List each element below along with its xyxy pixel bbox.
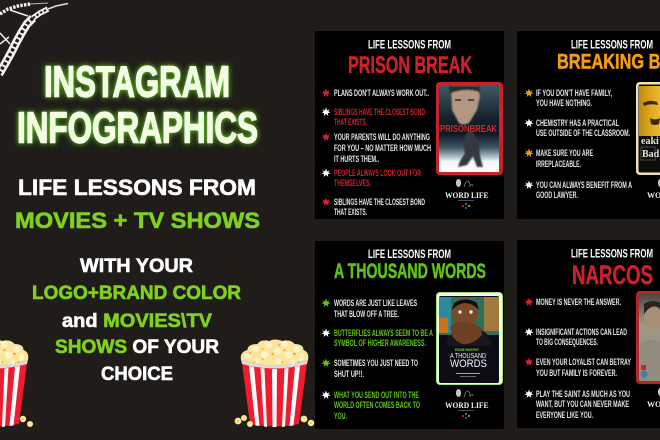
- bullet list: YOU.: [334, 411, 347, 421]
- bullet list: PLANS DON'T ALWAYS WORK OUT..: [334, 88, 429, 98]
- poster: A Thousand Words: [436, 292, 503, 385]
- bullet list: YOUR PARENTS WILL DO ANYTHING: [334, 132, 430, 142]
- panel: Breaking Bad: [517, 31, 660, 219]
- poster: Breaking Bad: eaki: [641, 136, 659, 147]
- bullet list: THAT EXISTS.: [334, 117, 367, 127]
- bullet list: SYMBOL OF HIGHER AWARENESS.: [334, 338, 426, 348]
- icon: popcorn left: [0, 340, 33, 427]
- bullet list: SHUT UP!!.: [334, 369, 364, 379]
- text block: offer: SHOWS OF YOUR: [55, 336, 219, 358]
- bullet list: THAT EXISTS.: [334, 207, 367, 217]
- panel: A Thousand Words: [315, 241, 504, 429]
- poster: A Thousand Words: EDDIE MURPHY: [455, 347, 479, 352]
- poster: Prison Break: PRISONBREAK: [440, 124, 498, 135]
- icon: film strip: [0, 3, 68, 74]
- bullet list: THAT BLOW OFF A TREE.: [334, 309, 399, 319]
- panel: Prison Break: [315, 31, 504, 219]
- text block: offer: LOGO+BRAND COLOR: [32, 283, 241, 304]
- logo: Word Life: WORD LIFE: [445, 191, 488, 200]
- poster: Prison Break: [436, 82, 503, 175]
- poster: Breaking Bad: [636, 82, 660, 175]
- bullet list: SOMETIMES YOU JUST NEED TO: [334, 358, 418, 368]
- poster: Breaking Bad: Bad: [642, 149, 660, 160]
- heading: Prison Break: PRISON BREAK: [348, 52, 472, 79]
- text block: offer: [32, 255, 241, 385]
- heading: Prison Break: [348, 40, 472, 79]
- text block: offer: WITH YOUR: [80, 255, 193, 277]
- bullet list: SIBLINGS HAVE THE CLOSEST BOND: [334, 197, 425, 207]
- bullet list: BUTTERFLIES ALWAYS SEEM TO BE A: [334, 328, 433, 338]
- title: Instagram Infographics: INFOGRAPHICS: [17, 104, 258, 152]
- subtitle: LIFE LESSONS FROM: [18, 175, 256, 200]
- bullet list: THEMSELVES.: [334, 178, 371, 188]
- bullet list: SIBLINGS HAVE THE CLOSEST BOND: [334, 107, 425, 117]
- bullet list: WHAT YOU SEND OUT INTO THE: [334, 390, 419, 400]
- heading: Breaking Bad: [557, 40, 660, 74]
- logo: Word Life: [445, 389, 488, 419]
- bullet list: IT HURTS THEM..: [334, 154, 379, 164]
- text block: offer: and MOVIES\TV: [62, 311, 212, 332]
- logo: Word Life: [647, 179, 660, 209]
- bullet list: WORLD OFTEN COMES BACK TO: [334, 400, 420, 410]
- bullet list: MAKE SURE YOU ARE: [536, 148, 593, 158]
- poster: A Thousand Words: A THOUSAND: [450, 353, 486, 360]
- heading: A Thousand Words: [334, 249, 486, 283]
- bullet list: PEOPLE ALWAYS LOOK OUT FOR: [334, 168, 421, 178]
- logo: Word Life: WORD LIFE: [445, 401, 488, 410]
- bullet list: TO BIG CONSEQUENCES.: [536, 337, 598, 347]
- panel: Narcos: [517, 240, 660, 428]
- bullet list: IRREPLACEABLE.: [536, 159, 581, 169]
- icon: popcorn right: [235, 340, 314, 427]
- bullet list: [524, 88, 632, 200]
- bullet list: [322, 298, 433, 421]
- subtitle: MOVIES + TV SHOWS: [15, 208, 260, 233]
- heading: Prison Break: LIFE LESSONS FROM: [368, 40, 451, 52]
- title: Instagram Infographics: [17, 58, 258, 152]
- heading: A Thousand Words: A THOUSAND WORDS: [334, 260, 486, 283]
- title: Instagram Infographics: INSTAGRAM: [44, 58, 230, 106]
- bullet list: EVERYONE LIKE YOU.: [536, 410, 593, 420]
- bullet list: YOU HAVE NOTHING.: [536, 98, 592, 108]
- bullet list: WORDS ARE JUST LIKE LEAVES: [334, 298, 417, 308]
- subtitle: [15, 175, 260, 233]
- heading: A Thousand Words: LIFE LESSONS FROM: [368, 249, 451, 261]
- poster: Narcos: [636, 291, 660, 384]
- bullet list: GOOD LAWYER.: [536, 190, 578, 200]
- logo: Word Life: [445, 179, 488, 209]
- bullet list: [524, 297, 631, 420]
- heading: Narcos: [571, 248, 653, 290]
- logo: Word Life: [647, 388, 660, 418]
- poster: A Thousand Words: WORDS: [450, 358, 487, 370]
- bullet list: IF YOU DON'T HAVE FAMILY,: [536, 88, 612, 98]
- bullet list: [322, 88, 431, 217]
- bullet list: FOR YOU – NO MATTER HOW MUCH: [334, 143, 431, 153]
- text block: offer: CHOICE: [101, 363, 173, 385]
